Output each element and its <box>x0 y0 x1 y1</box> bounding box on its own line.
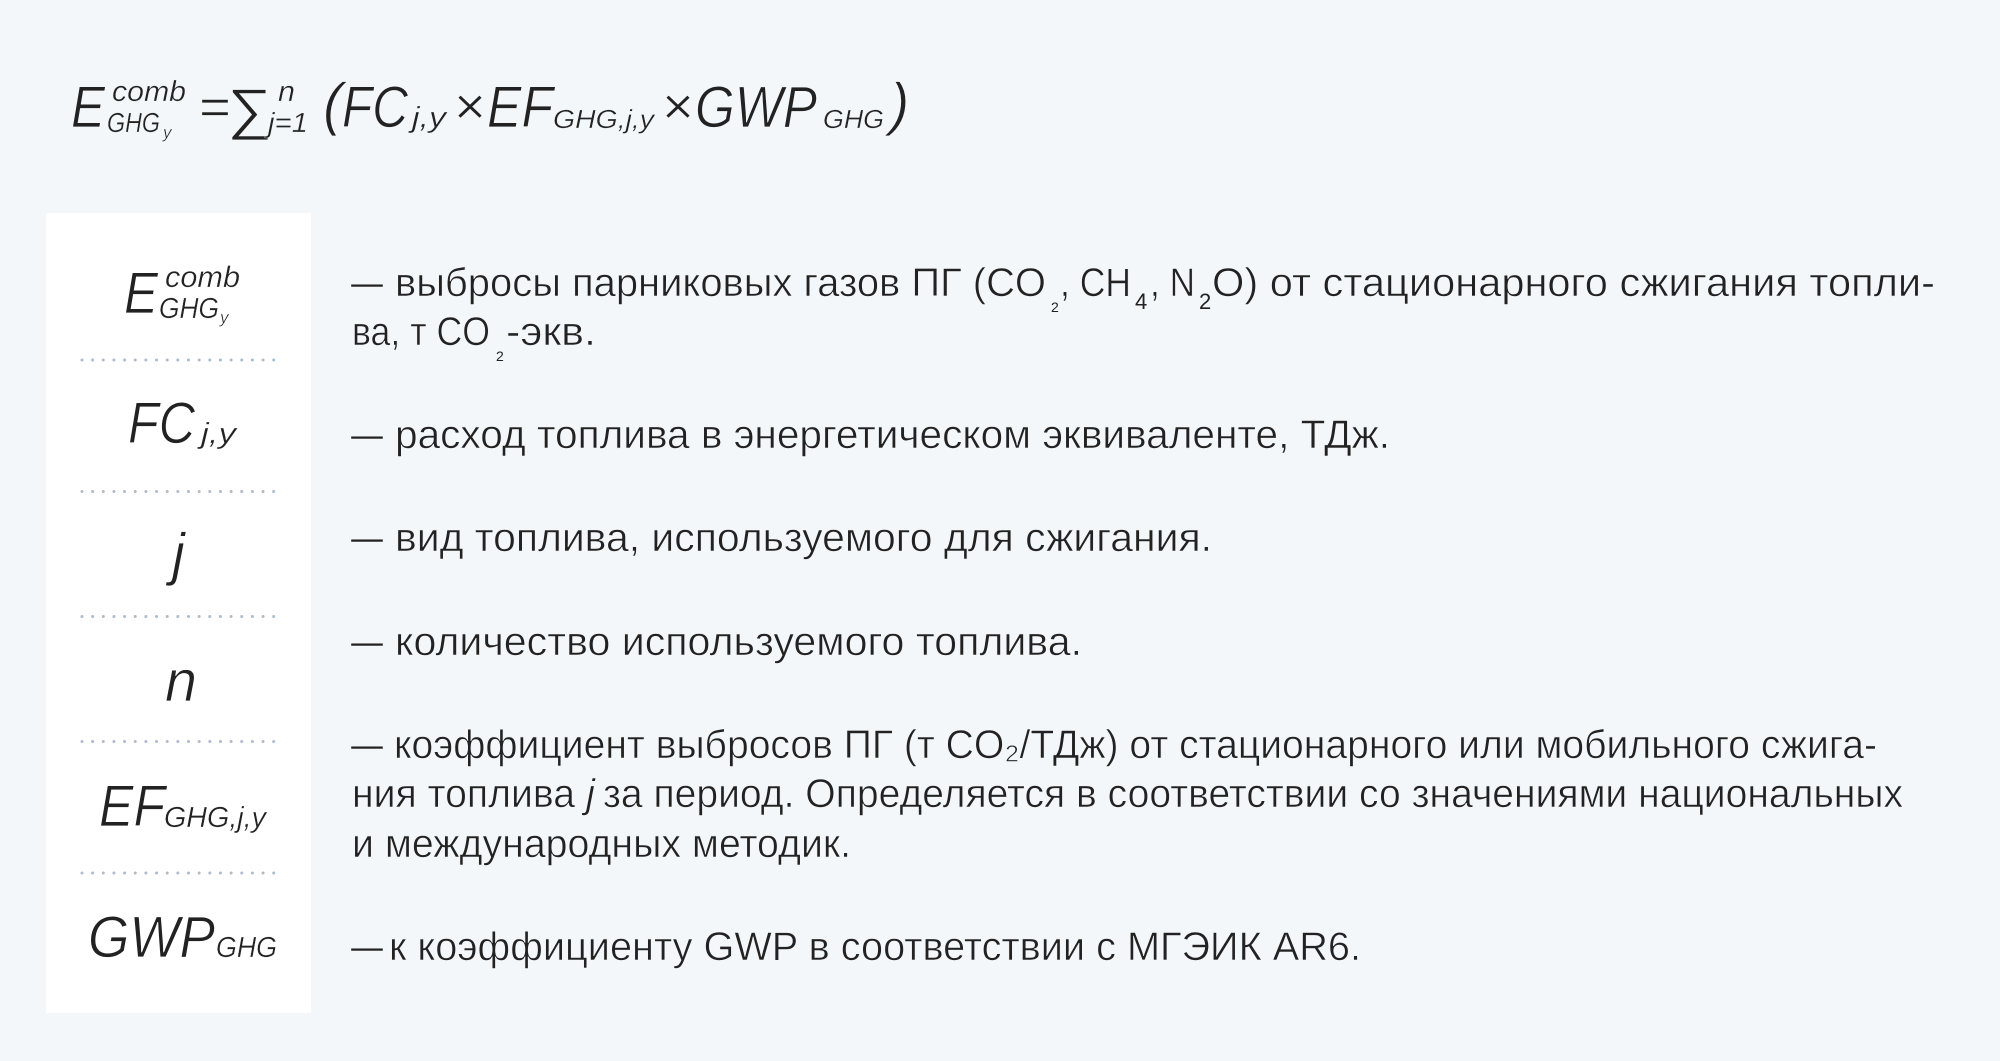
definition: emissions: 2 <box>1051 299 1059 315</box>
symbol: n: n <box>165 649 197 714</box>
title formula: GHG,j,y <box>553 104 656 134</box>
symbol: GWP GHG: GHG <box>216 932 277 964</box>
definition: emissions: ва, т CO <box>352 310 490 354</box>
symbol: EF GHG,j,y: GHG,j,y <box>164 802 267 834</box>
symbol: E comb GHG y: comb <box>165 261 240 294</box>
definition: emissions: -экв. <box>506 310 596 354</box>
symbol: E comb GHG y: E <box>124 261 159 326</box>
definition: fuel quantity: количество используемого топлива. <box>395 620 1082 664</box>
definition: emissions: 2 <box>496 348 504 364</box>
panel: symbols <box>46 213 311 1013</box>
definition: emissions: 2 <box>1199 289 1211 314</box>
title formula: ∑ <box>227 77 272 140</box>
title formula: GHG <box>823 104 884 134</box>
symbol: EF GHG,j,y <box>99 774 267 839</box>
symbol: E comb GHG y: y <box>219 308 230 327</box>
title formula: GHG <box>107 107 160 138</box>
definition: GWP: к коэффициенту GWP в соответствии с МГЭИК AR6. <box>389 925 1361 969</box>
title formula: ( <box>323 72 348 137</box>
title formula: ) <box>884 72 909 137</box>
definition: emissions: выбросы парниковых газов ПГ (CO <box>395 261 1046 305</box>
symbol: FC j,y: j,y <box>196 418 238 450</box>
title formula: GWP <box>695 75 817 140</box>
definition: fuel consumption: — <box>351 413 383 457</box>
definition: emission factor: за период. Определяется в соответствии со значениями национальных <box>603 772 1903 816</box>
definition: emissions: , CH <box>1060 261 1131 305</box>
title formula: j=1 <box>264 107 308 138</box>
title formula: y <box>162 123 173 142</box>
title formula <box>71 72 909 142</box>
title formula: E <box>71 75 106 140</box>
definition: fuel consumption: расход топлива в энергетическом эквиваленте, ТДж. <box>395 413 1390 457</box>
definition: emission factor <box>351 723 1903 866</box>
title formula: comb <box>112 76 186 108</box>
title formula: j,y <box>407 102 448 134</box>
definition: emission factor: j <box>581 772 596 816</box>
definition: fuel type: — <box>351 516 383 560</box>
definition: emission factor: ния топлива <box>352 772 576 816</box>
title formula: = <box>199 79 231 135</box>
definition: emissions: 4 <box>1135 289 1147 314</box>
definition: fuel quantity: — <box>351 620 383 664</box>
symbol: FC j,y: FC <box>128 391 196 456</box>
definition: emission factor: — <box>351 723 383 767</box>
title formula: × <box>454 78 486 136</box>
symbol: EF GHG,j,y: EF <box>99 774 168 839</box>
title formula: × <box>662 78 694 136</box>
title formula: n <box>278 76 295 108</box>
definition: emission factor: и международных методик. <box>352 822 851 866</box>
definition: emissions: , N <box>1150 261 1195 305</box>
symbol: GWP GHG: GWP <box>88 905 215 970</box>
definition: emissions <box>351 261 1935 364</box>
definition: emission factor: коэффициент выбросов ПГ (т CO₂/ТДж) от стационарного или мобильного сжига- <box>394 723 1877 767</box>
definition: GWP: — <box>351 925 383 969</box>
title formula: EF <box>487 75 556 140</box>
title formula: FC <box>342 75 409 140</box>
symbol: j: j <box>165 522 187 587</box>
definition: emissions: O) от стационарного сжигания топли- <box>1212 261 1935 305</box>
symbol: E comb GHG y: GHG <box>159 293 219 325</box>
definition: fuel type: вид топлива, используемого для сжигания. <box>395 516 1212 560</box>
symbol: E comb GHG y <box>124 261 240 327</box>
definition: emissions: — <box>351 261 383 305</box>
